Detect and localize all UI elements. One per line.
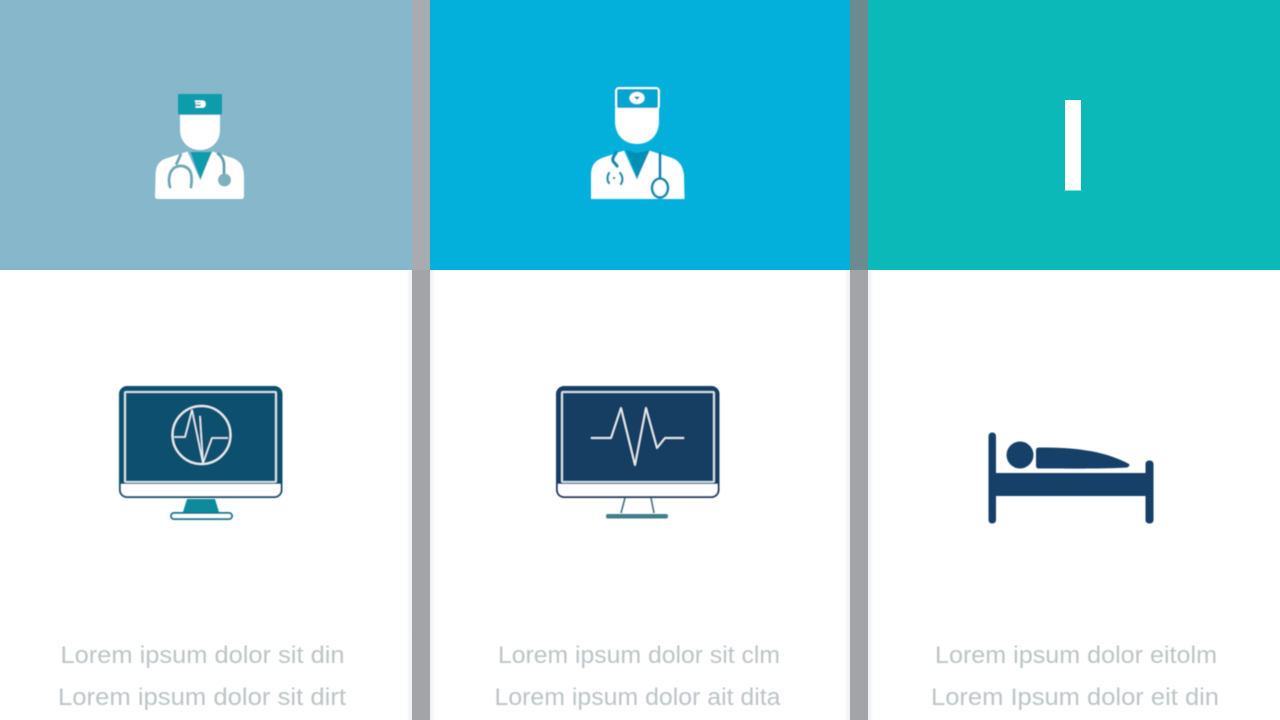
icon: doctor with head mirror <box>591 88 684 199</box>
text block: column 1 caption: Lorem ipsum dolor sit din <box>60 642 344 669</box>
icon: monitor with ECG line <box>557 387 718 518</box>
text block: column 2 caption: Lorem ipsum dolor ait dita <box>494 684 781 711</box>
panel: column 1 header <box>0 0 412 270</box>
text block: column 3 caption <box>931 642 1219 711</box>
panel: column 2 header <box>430 0 850 270</box>
panel: column 3 header <box>868 0 1280 270</box>
text block: column 3 caption: Lorem ipsum dolor eitolm <box>935 642 1217 669</box>
text block: column 2 caption: Lorem ipsum dolor sit clm <box>498 642 780 669</box>
icon: monitor with circular pulse <box>120 387 282 519</box>
divider: left gutter <box>406 0 436 720</box>
text block: column 2 caption <box>494 642 781 711</box>
text block: column 1 caption <box>58 642 346 711</box>
text block: column 1 caption: Lorem ipsum dolor sit dirt <box>58 684 346 711</box>
icon: white vertical bar <box>1065 100 1081 190</box>
text block: column 3 caption: Lorem Ipsum dolor eit din <box>931 684 1219 711</box>
icon: doctor with teal cap <box>155 94 244 199</box>
icon: patient lying in bed <box>988 432 1154 524</box>
divider: right gutter <box>844 0 874 720</box>
